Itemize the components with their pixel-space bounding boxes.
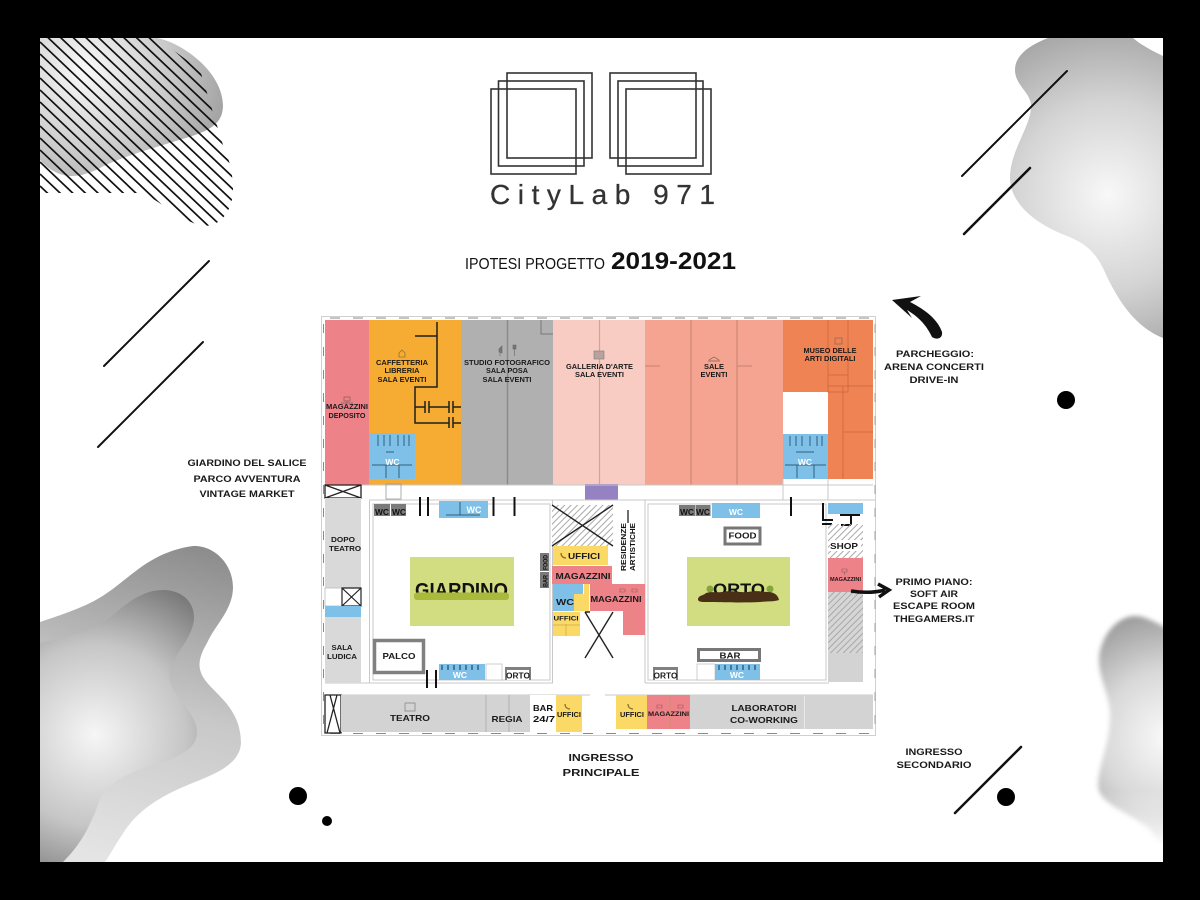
room: caffetteria: CAFFETTERIA	[376, 358, 428, 367]
room: magazzini deposito: MAGAZZINI	[326, 402, 368, 411]
kiosk: food: FOOD	[728, 530, 757, 540]
room: uffici bottom left: UFFICI	[557, 712, 581, 719]
heading: project period	[465, 248, 736, 275]
room: uffici centre: UFFICI	[568, 551, 600, 561]
room: magazzini right	[828, 558, 863, 592]
room: laboratori co-working: LABORATORI	[732, 704, 796, 713]
room: galleria d'arte: GALLERIA D'ARTE	[566, 362, 633, 371]
room: magazzini bottom	[647, 695, 690, 729]
room: regia	[486, 695, 530, 732]
heading: project period: 2019-2021	[611, 248, 736, 275]
door lines: orto top right	[791, 497, 860, 525]
label: parcheggio: DRIVE-IN	[910, 375, 958, 385]
wc: giardino bottom: WC	[453, 670, 467, 680]
wc block: top left: WC	[385, 457, 400, 467]
room: caffetteria: LIBRERIA	[384, 366, 420, 375]
blocked shaft: bottom left	[325, 695, 341, 733]
wc: orto top	[712, 503, 760, 518]
label: giardino del salice: GIARDINO DEL SALICE	[188, 458, 306, 468]
wc: orto bottom: WC	[730, 670, 744, 680]
room: magazzini right: MAGAZZINI	[830, 577, 862, 583]
blocked shaft: left	[325, 588, 361, 606]
label: primo piano: PRIMO PIANO:	[896, 577, 972, 587]
orto wc labels	[679, 505, 710, 517]
garden wc labels	[374, 504, 406, 517]
label: orto right	[653, 667, 678, 680]
arrow: to first floor	[851, 584, 889, 597]
corridor lines	[325, 479, 876, 695]
label: ingresso principale: PRINCIPALE	[562, 768, 640, 779]
room: sale eventi: SALE	[704, 362, 724, 371]
garden wc labels: WC	[392, 508, 406, 517]
wc block: top right	[783, 434, 828, 479]
plan outline and window marks	[322, 316, 876, 736]
room: magazzini centre: MAGAZZINI	[556, 571, 610, 581]
kiosk: bar	[698, 650, 760, 660]
room: magazzini deposito	[325, 320, 369, 485]
room: studio fotografico: SALA EVENTI	[482, 375, 532, 384]
decorative diagonal lines and dots	[98, 71, 1075, 826]
logo: CityLab 971	[490, 73, 715, 210]
label: orto left: ORTO	[506, 672, 530, 680]
wc: orto top: WC	[729, 507, 743, 517]
room: uffici lower centre	[553, 612, 580, 636]
label: primo piano	[893, 577, 975, 624]
room: sale eventi: EVENTI	[700, 370, 728, 379]
label: bar food: BAR	[542, 575, 550, 587]
room: uffici bottom right: UFFICI	[620, 712, 644, 719]
logo wordmark: CityLab 971	[490, 179, 715, 210]
label: giardino del salice: PARCO AVVENTURA	[194, 474, 301, 484]
room: caffetteria	[369, 320, 461, 485]
room: laboratori co-working	[690, 695, 804, 729]
label: parcheggio	[884, 349, 984, 385]
label: primo piano: SOFT AIR	[910, 589, 959, 599]
wc: orto bottom	[697, 664, 760, 680]
room: sala ludica	[325, 617, 361, 683]
label: giardino del salice: VINTAGE MARKET	[200, 489, 295, 499]
kiosk: bar: BAR	[720, 650, 740, 660]
wc: giardino top: WC	[466, 505, 482, 515]
kiosk: food	[725, 528, 760, 544]
room: bar 24/7: BAR	[533, 703, 553, 713]
label: bar food	[540, 553, 550, 588]
label: giardino del salice	[188, 458, 306, 499]
wc: centre: WC	[556, 597, 574, 607]
garden panel: giardino: GIARDINO	[415, 580, 508, 602]
room: shop: SHOP	[830, 542, 859, 551]
label: residenze artistiche: RESIDENZE	[621, 523, 628, 571]
room: sale eventi	[645, 320, 783, 485]
garden panel: orto: ORTO	[713, 581, 765, 599]
wc block: top right: WC	[798, 457, 812, 467]
blocked stair: centre	[585, 612, 613, 658]
purple passage	[585, 484, 618, 500]
room: galleria d'arte	[553, 320, 645, 485]
label: ingresso principale: INGRESSO	[568, 753, 634, 764]
room: dopo teatro: DOPO	[331, 535, 355, 544]
label: ingresso secondario: INGRESSO	[906, 747, 962, 757]
room: shop	[828, 524, 863, 558]
room: uffici bottom right	[616, 695, 647, 729]
label: residenze artistiche	[621, 510, 637, 571]
label: orto left	[505, 667, 531, 680]
heading: project period: IPOTESI PROGETTO	[465, 256, 605, 273]
label: primo piano: THEGAMERS.IT	[894, 614, 975, 624]
blob: top right	[1010, 38, 1163, 338]
room: sala ludica: SALA	[332, 643, 352, 652]
arrow: to parking	[892, 296, 942, 339]
room: teatro: TEATRO	[390, 713, 430, 723]
room: laboratori co-working: CO-WORKING	[730, 716, 798, 725]
room: magazzini bottom: MAGAZZINI	[648, 711, 689, 718]
room: dopo teatro	[325, 498, 361, 588]
garden panel: orto	[687, 557, 790, 626]
room: studio fotografico: STUDIO FOTOGRAFICO	[464, 358, 550, 367]
room: magazzini deposito: DEPOSITO	[328, 411, 366, 420]
blocked shaft: top left	[325, 485, 361, 498]
wc: centre	[553, 584, 589, 611]
stair detail	[386, 484, 401, 499]
double door: giardino bottom	[427, 670, 436, 688]
label: orto right: ORTO	[654, 672, 678, 680]
room: museo delle arti digitali: ARTI DIGITALI	[804, 356, 856, 363]
room: dopo teatro: TEATRO	[329, 544, 361, 553]
wc: giardino top	[439, 501, 488, 518]
wc strip: right	[828, 503, 863, 514]
room: uffici bottom left	[556, 695, 582, 732]
label: parcheggio: ARENA CONCERTI	[884, 362, 984, 372]
label: primo piano: ESCAPE ROOM	[893, 601, 975, 611]
room: caffetteria: SALA EVENTI	[378, 375, 426, 384]
room: magazzini centre right	[590, 584, 645, 635]
room: magazzini centre	[552, 566, 612, 584]
label: residenze artistiche: ARTISTICHE	[630, 523, 637, 571]
room: studio fotografico: SALA POSA	[486, 366, 528, 375]
logo squares	[491, 73, 711, 174]
room: uffici centre	[553, 546, 608, 565]
room: teatro	[341, 695, 486, 732]
room: galleria d'arte: SALA EVENTI	[575, 370, 624, 379]
room: regia: REGIA	[492, 714, 522, 724]
label: ingresso principale	[562, 753, 640, 779]
room: bar 24/7: 24/7	[533, 714, 555, 724]
room: magazzini centre right: MAGAZZINI	[590, 594, 642, 604]
blob: bottom left	[40, 546, 241, 862]
room: museo delle arti digitali	[783, 320, 873, 479]
garden wc labels: WC	[375, 508, 389, 517]
orto wc labels: WC	[696, 508, 710, 517]
room: studio fotografico	[461, 320, 565, 485]
label: parcheggio: PARCHEGGIO:	[896, 349, 974, 359]
wc block: top left	[369, 433, 415, 479]
label: ingresso secondario	[896, 747, 972, 770]
wc strip: left	[325, 606, 361, 617]
grey room	[828, 653, 863, 682]
room: bar 24/7	[530, 695, 556, 732]
floor plan	[322, 316, 876, 736]
double doors: giardino top	[420, 497, 514, 516]
hatched room	[828, 592, 863, 653]
room: sala ludica: LUDICA	[327, 652, 357, 661]
stage: palco: PALCO	[382, 651, 416, 661]
label: ingresso secondario: SECONDARIO	[896, 760, 972, 770]
stage: palco	[374, 640, 424, 672]
right column rooms	[828, 503, 863, 682]
wc: giardino bottom	[439, 664, 502, 680]
blob: top left with stripes	[40, 38, 233, 226]
orto wc labels: WC	[680, 508, 694, 517]
garden panel: giardino	[410, 557, 514, 626]
label: bar food: FOOD	[542, 555, 550, 570]
hatched void	[552, 505, 613, 546]
blob: bottom right	[1096, 613, 1163, 838]
room: uffici lower centre: UFFICI	[554, 616, 579, 622]
room: grey bottom right	[804, 695, 873, 729]
room: museo delle arti digitali: MUSEO DELLE	[804, 348, 857, 355]
